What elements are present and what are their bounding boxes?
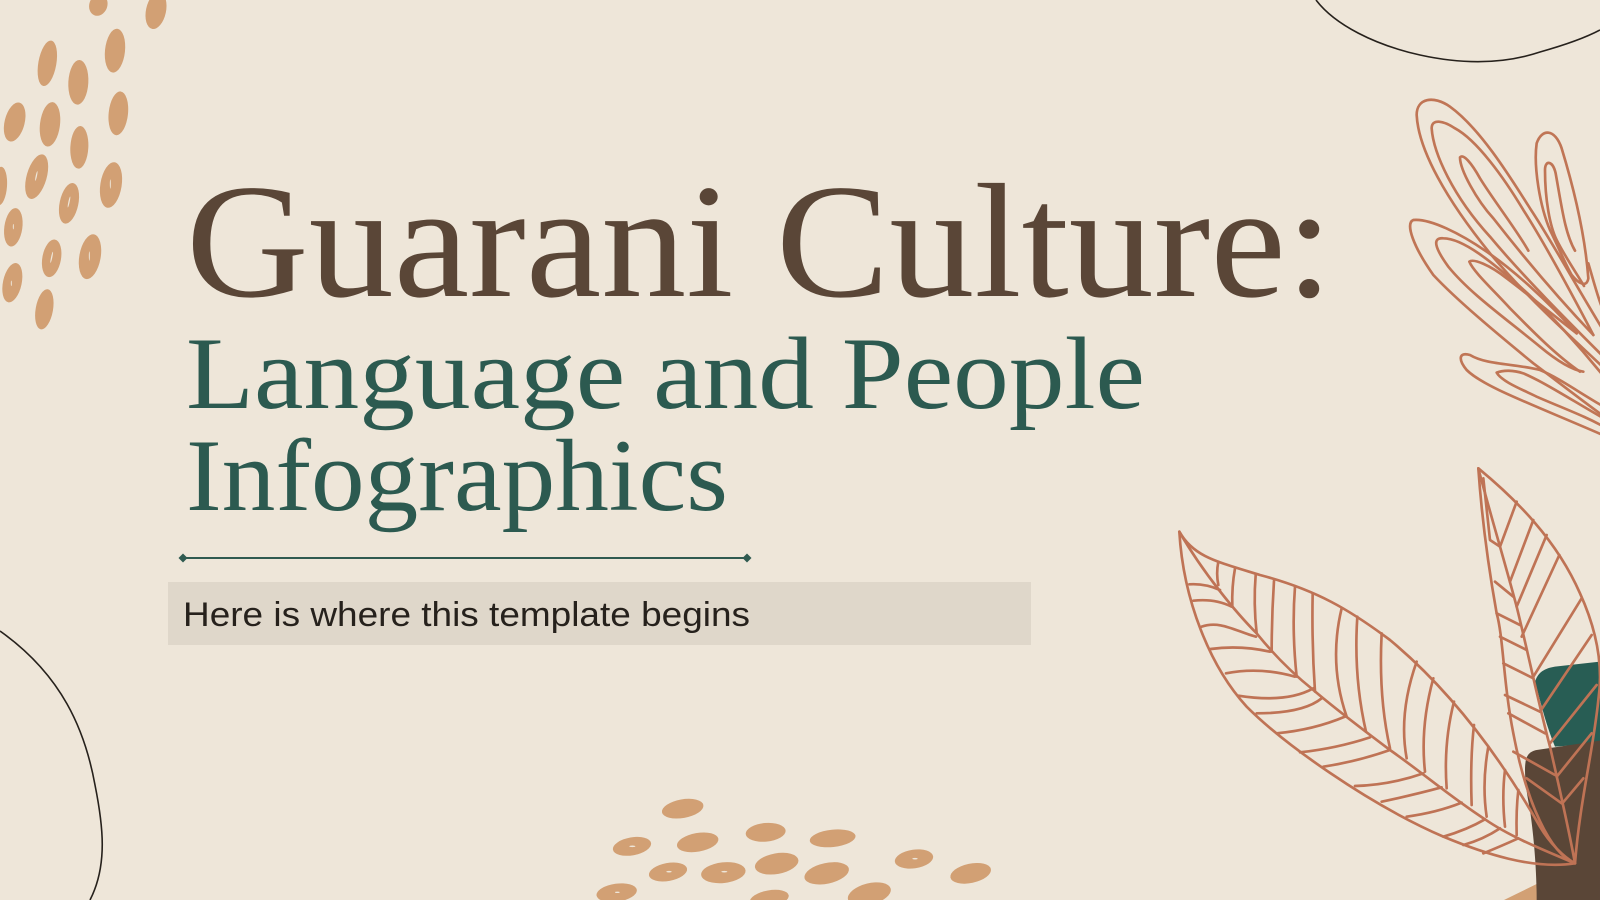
shape: tan wedge bbox=[1504, 884, 1540, 900]
illustration: plant with leaves and shapes bbox=[1179, 468, 1600, 900]
decoration: top-left dots bbox=[0, 0, 170, 331]
decoration: top-right black curve bbox=[1316, 0, 1600, 62]
subtitle band bbox=[168, 582, 1031, 645]
illustration: outline leaves top right bbox=[1410, 100, 1600, 437]
leaf: upright bbox=[1478, 468, 1600, 863]
leaf: large diagonal bbox=[1179, 532, 1575, 865]
shape: brown block bbox=[1525, 741, 1600, 900]
heading: Infographics: Infographics bbox=[186, 419, 728, 533]
divider line with diamond ends bbox=[178, 554, 752, 562]
heading: Language and People: Language and People bbox=[186, 317, 1145, 431]
decoration: bottom-centre dots bbox=[595, 796, 993, 900]
subtitle text: Here is where this template begins bbox=[183, 596, 750, 634]
shape: green block bbox=[1535, 662, 1600, 747]
title bbox=[186, 152, 1333, 533]
heading: Guarani Culture: Guarani Culture: bbox=[186, 152, 1333, 332]
decoration: bottom-left black curve bbox=[0, 631, 102, 900]
